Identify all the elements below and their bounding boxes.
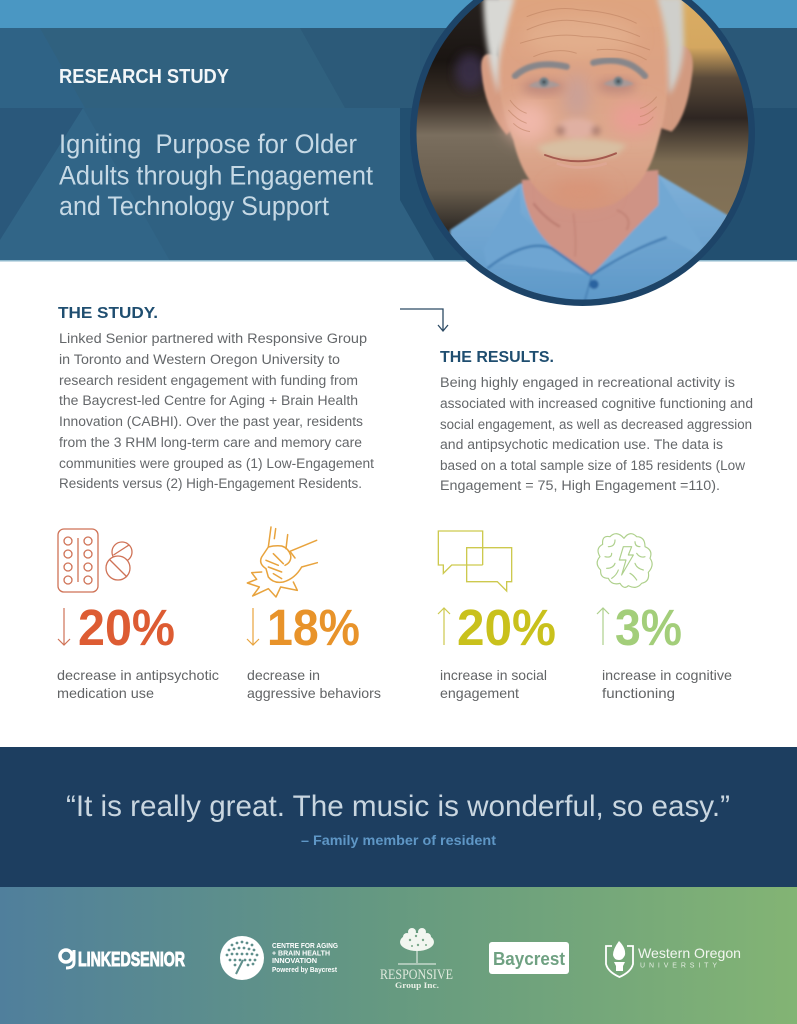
label: aggressive behaviors xyxy=(247,685,381,701)
quote text: “It is really great. The music is wonderful, so easy.” xyxy=(66,790,730,823)
heading: the study: THE STUDY. xyxy=(58,305,158,322)
logo: Linked Senior xyxy=(60,949,185,971)
title xyxy=(59,129,373,221)
text block: results description: Engagement = 75, High Engagement =110). xyxy=(440,478,720,493)
label xyxy=(57,667,219,701)
text block: results description: social engagement, as well as decreased aggression xyxy=(440,417,752,432)
title: Adults through Engagement xyxy=(59,160,373,190)
stat: cognitive functioning xyxy=(597,534,732,701)
heading: the results: THE RESULTS. xyxy=(440,349,554,366)
quote band xyxy=(0,747,797,887)
label: increase in cognitive xyxy=(602,667,732,683)
label: increase in social xyxy=(440,667,547,683)
eyebrows xyxy=(515,61,645,76)
arrow: down xyxy=(58,608,70,645)
icon: brain with lightning xyxy=(597,534,652,587)
arrow: down xyxy=(247,608,259,645)
title: and Technology Support xyxy=(59,191,329,221)
arrow: up xyxy=(438,608,450,645)
text block: study description: research resident engagement with funding from xyxy=(59,373,358,388)
logo: Baycrest xyxy=(489,942,569,974)
number: 20%: 20% xyxy=(457,599,556,656)
label: decrease in antipsychotic xyxy=(57,667,219,683)
title: Igniting Purpose for Older xyxy=(59,129,357,159)
logo: Centre for Aging + Brain Health Innovation: CENTRE FOR AGING xyxy=(272,943,339,950)
number: 18%: 18% xyxy=(267,599,360,656)
icon: pill pack xyxy=(58,529,132,592)
face xyxy=(497,0,668,209)
hair xyxy=(483,0,684,95)
label: functioning xyxy=(602,685,675,701)
shirt xyxy=(450,170,740,307)
arrow: up xyxy=(597,608,609,645)
footer logo band xyxy=(0,887,797,1024)
label xyxy=(247,667,381,701)
text block: results description: associated with increased cognitive functioning and xyxy=(440,396,753,411)
label: decrease in xyxy=(247,667,320,683)
neck xyxy=(522,170,658,275)
quote attribution: – Family member of resident xyxy=(301,832,496,848)
logo: Baycrest: Baycrest xyxy=(493,948,565,969)
icon: fist impact xyxy=(247,527,317,597)
logo: Centre for Aging + Brain Health Innovation: INNOVATION xyxy=(272,958,317,965)
collar xyxy=(510,188,580,272)
text block: study description xyxy=(59,331,374,491)
forehead wrinkles xyxy=(508,8,657,132)
text block: study description: in Toronto and Western Oregon University to xyxy=(59,352,340,367)
text block: results description: Being highly engaged in recreational activity is xyxy=(440,375,735,390)
ears xyxy=(481,45,693,135)
logo: Centre for Aging + Brain Health Innovation: + BRAIN HEALTH xyxy=(272,950,330,958)
text block: study description: the Baycrest-led Centre for Aging + Brain Health xyxy=(59,393,358,408)
text block: results description: and antipsychotic medication use. The data is xyxy=(440,437,723,452)
icon: speech bubbles xyxy=(438,531,512,591)
arrow: connector from study to results xyxy=(400,309,448,331)
label xyxy=(602,667,732,701)
text block: study description: from the 3 RHM long-term care and memory care xyxy=(59,435,362,450)
mouth xyxy=(545,153,616,161)
label xyxy=(440,667,547,701)
logo: Western Oregon University xyxy=(606,941,741,977)
logo: Responsive Group Inc. xyxy=(380,928,453,990)
logo: Responsive Group Inc.: Group Inc. xyxy=(395,981,439,990)
text block: study description: Residents versus (2) High-Engagement Residents. xyxy=(59,476,362,491)
text block: results description xyxy=(440,375,753,493)
section label: research study: RESEARCH STUDY xyxy=(59,66,230,88)
eye sockets xyxy=(522,79,637,95)
label: medication use xyxy=(57,685,154,701)
stat: antipsychotic medication xyxy=(57,529,219,701)
number: 3%: 3% xyxy=(615,599,682,656)
stat: aggressive behaviors xyxy=(247,527,381,701)
logo: Centre for Aging + Brain Health Innovation: Powered by Baycrest xyxy=(272,967,338,974)
text block: results description: based on a total sample size of 185 residents (Low xyxy=(440,458,745,473)
label: engagement xyxy=(440,685,519,701)
text block: study description: communities were grouped as (1) Low-Engagement xyxy=(59,456,374,471)
header banner xyxy=(0,0,797,262)
logo: Western Oregon University: Western Oregon xyxy=(638,945,741,961)
logo: Responsive Group Inc.: RESPONSIVE xyxy=(380,967,453,983)
number: 20%: 20% xyxy=(78,599,175,656)
cheeks and shading xyxy=(507,17,655,204)
logo: Linked Senior: LINKEDSENIOR xyxy=(78,949,185,971)
text block: study description: Innovation (CABHI). Over the past year, residents xyxy=(59,414,363,429)
text block: study description: Linked Senior partnered with Responsive Group xyxy=(59,331,367,346)
logo: Centre for Aging + Brain Health Innovation xyxy=(220,936,339,980)
eyes xyxy=(528,77,634,88)
nose and moustache xyxy=(537,118,627,159)
photo: portrait of older man in circular frame xyxy=(410,0,755,307)
logo: Western Oregon University: UNIVERSITY xyxy=(640,962,717,970)
stat: social engagement xyxy=(438,531,556,701)
